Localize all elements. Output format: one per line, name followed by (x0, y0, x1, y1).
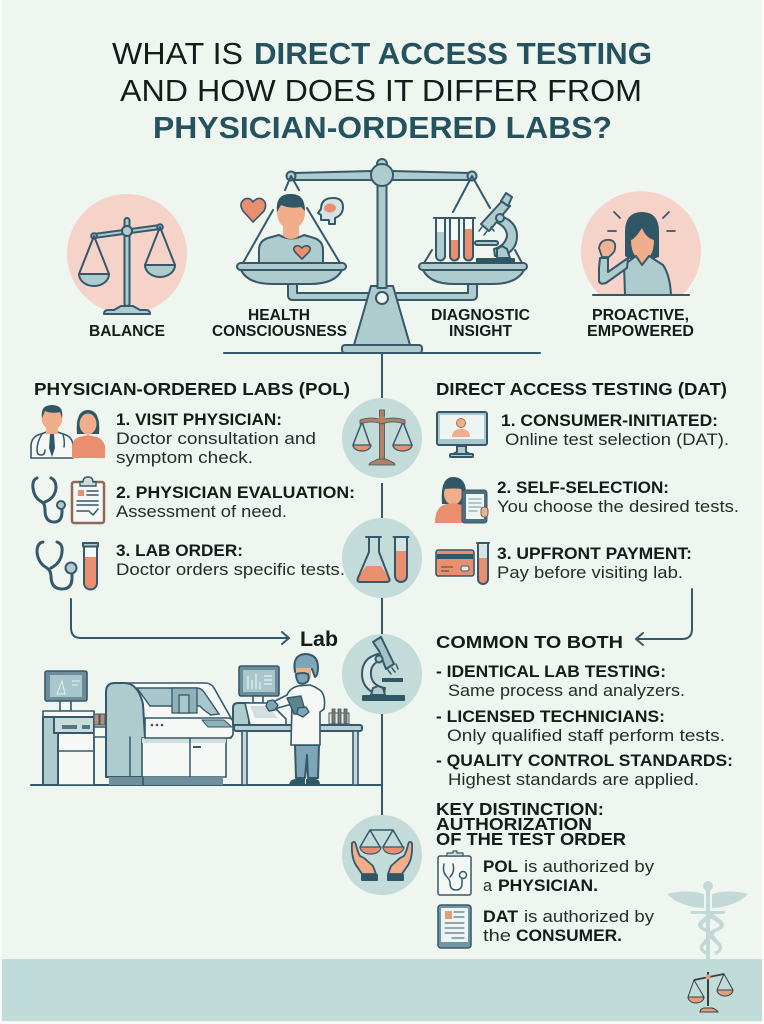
text: step 1 DAT: Online test selection (DAT). (505, 431, 729, 449)
label: health consciousness (212, 307, 347, 340)
circle icon: flask and tube (342, 518, 422, 598)
arrow: DAT to common (636, 589, 692, 645)
list: common items: Highest standards are applied. (448, 771, 699, 789)
icon: heart (241, 198, 266, 222)
icon: person on scale (259, 194, 323, 263)
icon: small footer scale (688, 972, 733, 1012)
text: POL authorization: is authorized by (524, 858, 655, 876)
footer band (2, 959, 762, 1021)
text: DAT authorization: is authorized by (524, 908, 655, 926)
lab scene illustration (31, 654, 382, 785)
panel: balance icon (67, 194, 187, 314)
text: step 2 DAT (497, 479, 739, 516)
text: step 2 DAT: 2. SELF-SELECTION: (497, 479, 669, 497)
label: proactive, empowered: PROACTIVE, (592, 307, 689, 324)
text: step 3 POL (116, 542, 345, 579)
icon: monitor with person (437, 412, 487, 457)
text: POL authorization: PHYSICIAN. (498, 877, 598, 895)
text: step 1 POL: 1. VISIT PHYSICIAN: (116, 411, 282, 429)
heading: POL: PHYSICIAN-ORDERED LABS (POL) (34, 379, 350, 399)
label: lab: Lab (300, 628, 338, 651)
text: step 2 POL: Assessment of need. (116, 503, 287, 521)
icon: head with brain (318, 198, 343, 224)
analyzer (106, 683, 233, 785)
list: common items: Only qualified staff perform tests. (447, 727, 725, 745)
left pan (241, 270, 342, 284)
title: DIRECT ACCESS TESTING (254, 36, 652, 71)
label: diagnostic insight: DIAGNOSTIC (431, 307, 530, 324)
panel: proactive woman icon (581, 191, 701, 295)
heading: DAT: DIRECT ACCESS TESTING (DAT) (436, 379, 727, 399)
right workstation (233, 666, 362, 785)
text: step 2 POL: 2. PHYSICIAN EVALUATION: (116, 484, 355, 502)
heading: key distinction: OF THE TEST ORDER (436, 829, 626, 849)
heading: key distinction: KEY DISTINCTION: (436, 799, 604, 819)
title: WHAT IS (112, 36, 243, 71)
central scale (224, 159, 540, 353)
list: common items: - IDENTICAL LAB TESTING: (436, 663, 666, 681)
text: POL authorization: a (483, 877, 493, 895)
circle icon: hands and scales (342, 815, 422, 895)
text: step 3 POL: Doctor orders specific tests. (116, 561, 345, 579)
text: step 1 DAT (501, 412, 729, 449)
arrow: POL to lab (71, 599, 289, 644)
right pan (423, 270, 524, 284)
list: common items: Same process and analyzers. (448, 682, 685, 700)
central vertical divider (381, 353, 383, 816)
heading: common to both: COMMON TO BOTH (436, 632, 623, 652)
circle icon: scales (342, 398, 422, 478)
label: diagnostic insight (431, 307, 530, 340)
icon: person with tablet (435, 477, 488, 523)
circle icon: microscope (342, 634, 422, 714)
text: step 1 POL (116, 411, 316, 467)
title: AND HOW DOES IT DIFFER FROM (120, 73, 642, 108)
text: step 3 POL: 3. LAB ORDER: (116, 542, 243, 560)
heading: key distinction: AUTHORIZATION (436, 814, 592, 834)
text: DAT authorization: CONSUMER. (516, 927, 622, 945)
text: POL authorization: POL (483, 858, 518, 876)
title (112, 36, 652, 145)
label: health consciousness: HEALTH (248, 307, 310, 324)
text: step 1 DAT: 1. CONSUMER-INITIATED: (501, 412, 718, 430)
label: diagnostic insight: INSIGHT (449, 323, 513, 340)
text: step 3 DAT: 3. UPFRONT PAYMENT: (497, 545, 692, 563)
text: step 3 DAT (497, 545, 692, 582)
tube rack (94, 714, 130, 785)
text: step 2 POL (116, 484, 355, 521)
text: DAT authorization: DAT (483, 908, 518, 926)
heading: key distinction (436, 799, 626, 849)
label: proactive, empowered (587, 307, 694, 340)
icon: doctor and patient (31, 405, 105, 458)
list: common items (436, 663, 733, 789)
icon: test tubes and microscope (434, 193, 517, 264)
icon: credit card and tube (436, 543, 489, 584)
lab technician (266, 654, 325, 785)
text: step 2 DAT: You choose the desired tests. (497, 498, 739, 516)
icon: stethoscope and test tube (37, 542, 98, 590)
label: health consciousness: CONSCIOUSNESS (212, 323, 347, 340)
icon: clipboard with stethoscope (438, 851, 471, 895)
label: balance: BALANCE (89, 323, 165, 340)
text: step 3 DAT: Pay before visiting lab. (497, 564, 683, 582)
text: step 1 POL: Doctor consultation and (116, 430, 316, 448)
title: PHYSICIAN-ORDERED LABS? (153, 110, 612, 145)
left workstation (43, 671, 94, 785)
watermark: caduceus (667, 881, 748, 959)
text: DAT authorization: the (483, 927, 511, 945)
icon: tablet form (438, 905, 471, 948)
label: proactive, empowered: EMPOWERED (587, 323, 694, 340)
text: DAT authorization (483, 908, 655, 945)
list: common items: - LICENSED TECHNICIANS: (436, 708, 665, 726)
text: POL authorization (483, 858, 655, 895)
icon: stethoscope and clipboard (33, 477, 104, 523)
text: step 1 POL: symptom check. (116, 449, 253, 467)
list: common items: - QUALITY CONTROL STANDARDS: (436, 752, 733, 770)
